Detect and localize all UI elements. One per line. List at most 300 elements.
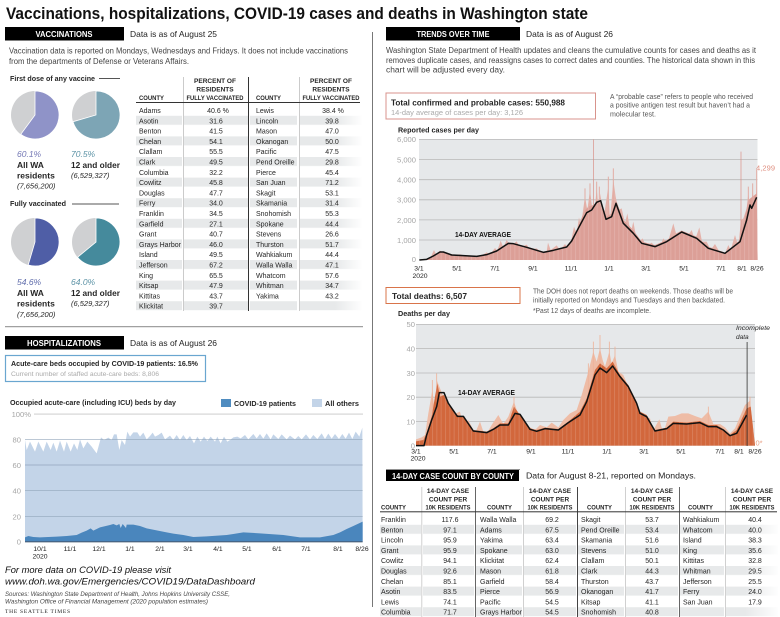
table: percent fully vaccinated by county: 32.2 <box>209 170 223 177</box>
table: case count by county: 53.7 <box>645 517 659 524</box>
table: percent fully vaccinated by county: Pacific <box>256 149 277 156</box>
panel: 14-day case count by county <box>380 470 780 617</box>
label: fully vaccinated all residents <box>17 277 56 319</box>
annotation: incomplete data <box>736 325 770 446</box>
table: percent fully vaccinated by county: Klickitat <box>139 304 163 311</box>
area chart: hospital beds: 11/1 <box>64 546 77 553</box>
chart: reported cases per day: 2020 <box>412 273 428 280</box>
table: percent fully vaccinated by county: Skamania <box>256 201 287 208</box>
table: case count by county: 40.0 <box>748 527 762 534</box>
table: case count by county: Lincoln <box>381 538 403 545</box>
table: case count by county: 14-DAY CASE <box>731 488 774 495</box>
chart: deaths per day: 8/26 <box>748 448 762 456</box>
label: latest cases: 4,299 <box>756 164 775 172</box>
label: first dose 12 and older: 70.5% <box>71 149 96 159</box>
area chart: hospital beds: 5/1 <box>242 546 252 553</box>
area chart: hospital beds: 10/1 <box>33 546 47 553</box>
table: case count by county: 32.8 <box>748 558 762 565</box>
table: percent fully vaccinated by county: Douglas <box>139 190 165 197</box>
intro text: vaccinations <box>9 46 348 66</box>
table: case count by county: 41.7 <box>645 589 659 596</box>
title: Vaccinations, hospitalizations, COVID-19 cases and deaths in Washington state <box>6 4 588 23</box>
chart title: cases: Reported cases per day <box>398 126 480 134</box>
annotation: incomplete data: data <box>736 334 749 341</box>
table: percent fully vaccinated by county: Spokane <box>256 221 284 228</box>
table: case count by county: 69.2 <box>545 517 559 524</box>
area chart: hospital beds: 3/1 <box>183 546 193 553</box>
table: case count by county: 14-DAY CASE <box>529 488 572 495</box>
table: percent fully vaccinated by county: Chelan <box>139 139 161 146</box>
table: percent fully vaccinated by county: 47.5 <box>325 149 339 156</box>
table: case count by county: 74.1 <box>443 599 457 606</box>
note: probable case <box>610 94 753 118</box>
table: percent fully vaccinated by county: Kitsap <box>139 283 159 290</box>
table: percent fully vaccinated by county: 47.9 <box>209 283 223 290</box>
table: percent fully vaccinated by county: 39.8 <box>325 118 339 125</box>
legend: COVID-19 patients <box>234 399 296 408</box>
area chart: hospital beds: 0 <box>17 538 21 547</box>
label: first dose 12 and older: 12 and older <box>71 160 121 170</box>
table: percent fully vaccinated by county: PERCENT OF <box>310 78 352 85</box>
area chart: hospital beds: 4/1 <box>213 546 223 553</box>
table: percent fully vaccinated by county: Pierce <box>256 170 276 177</box>
table: percent fully vaccinated by county: 55.5 <box>209 149 223 156</box>
table: case count by county: 41.1 <box>645 599 659 606</box>
table: case count by county: 54.5 <box>545 599 559 606</box>
table: percent fully vaccinated by county: 34.5 <box>209 211 223 218</box>
link: more data: www.doh.wa.gov/Emergencies/COVID19/DataDashboard <box>5 576 256 588</box>
annotation: incomplete data: Incomplete <box>736 325 770 332</box>
link: more data: For more data on COVID-19 please visit <box>5 565 171 576</box>
table: case count by county: Grant <box>381 548 399 555</box>
chart: reported cases per day: 8/26 <box>750 266 764 272</box>
callout: beds occupied: Acute-care beds occupied by COVID-19 patients: 16.5% <box>11 359 198 368</box>
table: percent fully vaccinated by county: Benton <box>139 129 161 136</box>
area chart: hospital beds: 40 <box>13 487 21 496</box>
table: case count by county: Pierce <box>480 589 500 596</box>
table: case count by county: Columbia <box>381 610 411 617</box>
table: percent fully vaccinated by county <box>136 77 363 312</box>
area chart: hospital beds <box>12 410 369 560</box>
chart: reported cases per day: 3/1 <box>414 266 424 272</box>
table: percent fully vaccinated by county: Lincoln <box>256 118 278 125</box>
area chart: hospital beds: 100% <box>12 410 31 419</box>
sources: Sources: Washington State Department of Health, Johns Hopkins University CSSE, <box>5 592 230 598</box>
date note: vaccinations: Data is as of August 25 <box>130 29 217 39</box>
table: percent fully vaccinated by county: 34.7 <box>325 283 339 290</box>
date note: hospitalizations: Data is as of August 26 <box>130 338 217 348</box>
table: percent fully vaccinated by county: 43.2 <box>325 293 339 300</box>
table: percent fully vaccinated by county: 31.6 <box>209 118 223 125</box>
table: case count by county: COUNTY <box>381 504 407 512</box>
note: deaths reporting <box>533 288 733 315</box>
fully vaccinated heading <box>10 199 119 208</box>
table: case count by county: Pacific <box>480 599 501 606</box>
area chart: hospital beds: 60 <box>13 461 21 470</box>
table: case count by county: 10K RESIDENTS <box>730 504 775 512</box>
table: case count by county: Jefferson <box>683 579 712 586</box>
callout: total cases <box>386 93 596 119</box>
chart: reported cases per day: 2,000 <box>397 216 416 225</box>
table: percent fully vaccinated by county: Wahkiakum <box>256 252 292 259</box>
table: percent fully vaccinated by county: 57.6 <box>325 273 339 280</box>
area chart: hospital beds: 2020 <box>32 554 48 560</box>
table: case count by county: Clallam <box>581 558 605 565</box>
label: fully vaccinated all residents: residents <box>17 298 55 308</box>
date note: case count: Data for August 8-21, reported on Mondays. <box>526 470 696 480</box>
panel: vaccinations <box>5 27 363 319</box>
heading: vaccinations: VACCINATIONS <box>36 30 93 39</box>
table: percent fully vaccinated by county: 67.2 <box>209 262 223 270</box>
intro text: vaccinations: from the departments of Defense or Veterans Affairs. <box>9 57 189 66</box>
label: 14-day average, cases: 14-DAY AVERAGE <box>455 232 511 239</box>
label: first dose 12 and older <box>71 149 121 180</box>
table: case count by county: Clark <box>581 568 598 576</box>
table: case count by county: COUNTY <box>688 504 714 512</box>
area chart: hospital beds: 80 <box>13 436 21 445</box>
table: percent fully vaccinated by county: Whatcom <box>256 273 286 280</box>
table: case count by county: Spokane <box>480 548 508 555</box>
table: case count by county: 95.9 <box>443 538 457 545</box>
table: percent fully vaccinated by county: Clallam <box>139 149 163 156</box>
table: case count by county: Walla Walla <box>480 517 517 524</box>
table: percent fully vaccinated by county: 49.5 <box>209 160 223 166</box>
table: case count by county: 38.3 <box>748 538 762 545</box>
chart: deaths per day: 40 <box>407 344 415 354</box>
chart: reported cases per day: 3,000 <box>397 196 416 204</box>
chart: reported cases per day: 7/1 <box>716 266 726 272</box>
table: case count by county: Stevens <box>581 548 607 555</box>
area chart: hospital beds: 20 <box>13 512 21 521</box>
note: deaths reporting: *Past 12 days of deaths are incomplete. <box>533 308 651 315</box>
table: percent fully vaccinated by county: Ferry <box>139 201 156 208</box>
label: fully vaccinated 12 and older: 12 and older <box>71 288 121 298</box>
pie: fully vaccinated 12 and older <box>72 218 120 266</box>
chart: deaths per day: 5/1 <box>676 448 686 456</box>
table: case count by county: 40.8 <box>645 610 659 617</box>
table: percent fully vaccinated by county: Thurston <box>256 242 284 249</box>
table: percent fully vaccinated by county: 27.1 <box>209 221 223 228</box>
panel: hospitalizations <box>5 336 369 560</box>
chart: reported cases per day: 6,000 <box>397 135 416 144</box>
label: fully vaccinated 12 and older <box>71 277 121 308</box>
chart: deaths per day: 1/1 <box>602 448 612 456</box>
table: percent fully vaccinated by county: Walla Walla <box>256 262 293 270</box>
label: fully vaccinated all residents: 54.6% <box>17 277 42 287</box>
chart: deaths per day: 5/1 <box>449 448 459 456</box>
area chart: hospital beds: 7/1 <box>301 546 311 553</box>
table: percent fully vaccinated by county: 50.0 <box>325 139 339 146</box>
chart: deaths per day: 7/1 <box>715 448 725 456</box>
table: case count by county: Skagit <box>581 517 601 524</box>
table: percent fully vaccinated by county: RESIDENTS <box>312 86 350 94</box>
table: case count by county: Whitman <box>683 568 711 576</box>
table: case count by county: Whatcom <box>683 527 713 534</box>
link: more data <box>5 565 256 588</box>
table: case count by county: San Juan <box>683 599 713 606</box>
table: case count by county: 71.7 <box>443 610 457 617</box>
chart: reported cases per day: 5/1 <box>679 266 689 272</box>
table: percent fully vaccinated by county: 45.4 <box>325 170 339 177</box>
label: first dose all residents: residents <box>17 170 55 180</box>
table: case count by county: Douglas <box>381 568 407 576</box>
table: case count by county: 63.4 <box>545 538 559 545</box>
chart: reported cases per day <box>397 135 775 280</box>
table: percent fully vaccinated by county: Stevens <box>256 232 282 239</box>
note: probable case: A “probable case” refers to people who received <box>610 94 753 101</box>
chart title: beds by day: Occupied acute-care (including ICU) beds by day <box>10 398 177 407</box>
table: percent fully vaccinated by county: RESIDENTS <box>196 86 234 94</box>
table: percent fully vaccinated by county: 54.1 <box>209 139 223 146</box>
table: case count by county: 56.9 <box>545 589 559 596</box>
table: percent fully vaccinated by county: 45.8 <box>209 180 223 187</box>
table: percent fully vaccinated by county: 65.5 <box>209 273 223 280</box>
table: percent fully vaccinated by county: Snohomish <box>256 211 291 218</box>
heading: trends <box>386 27 520 40</box>
label: first dose all residents: 60.1% <box>17 149 42 159</box>
label: latest deaths: 0* <box>756 438 763 448</box>
table: percent fully vaccinated by county: COUNTY <box>139 95 165 102</box>
intro text: trends <box>386 46 757 74</box>
table: percent fully vaccinated by county: 40.7 <box>209 232 223 239</box>
table: case count by county: 50.1 <box>645 558 659 565</box>
table: case count by county: 94.1 <box>443 558 457 565</box>
table: case count by county: 40.4 <box>748 517 762 524</box>
table: case count by county: 63.0 <box>545 548 559 555</box>
table: case count by county: Benton <box>381 527 403 534</box>
table: percent fully vaccinated by county: 47.0 <box>325 129 339 136</box>
table: case count by county: Franklin <box>381 517 406 524</box>
table: case count by county: Mason <box>480 568 501 576</box>
heading: hospitalizations <box>5 336 124 350</box>
pie: first dose all residents <box>11 91 59 139</box>
chart: deaths per day: 30 <box>407 369 415 378</box>
table: percent fully vaccinated by county: 46.0 <box>209 242 223 249</box>
intro text: trends: chart will be adjusted every day. <box>386 66 505 74</box>
table: case count by county: Skamania <box>581 538 612 545</box>
table: percent fully vaccinated by county: Mason <box>256 129 277 136</box>
table: percent fully vaccinated by county: 55.3 <box>325 211 339 218</box>
first dose heading: First dose of any vaccine <box>10 74 95 83</box>
table: percent fully vaccinated by county: FULLY VACCINATED <box>186 95 244 102</box>
panel: trends over time <box>386 27 775 462</box>
table: case count by county: Adams <box>480 527 502 534</box>
table: percent fully vaccinated by county: San Juan <box>256 180 286 187</box>
table: percent fully vaccinated by county: Okanogan <box>256 139 288 146</box>
table: percent fully vaccinated by county: Franklin <box>139 211 164 218</box>
table: percent fully vaccinated by county: Whitman <box>256 283 284 290</box>
legend <box>221 399 359 408</box>
area chart: hospital beds: 12/1 <box>92 546 106 553</box>
label: fully vaccinated all residents: (7,656,200) <box>17 310 56 319</box>
table: percent fully vaccinated by county: Island <box>139 252 158 259</box>
callout: beds occupied <box>6 356 206 382</box>
table: case count by county: COUNTY <box>487 504 513 512</box>
chart: reported cases per day: 0 <box>412 255 416 264</box>
label: fully vaccinated all residents: All WA <box>17 288 44 298</box>
table: case count by county: Ferry <box>683 589 700 596</box>
chart: deaths per day: 3/1 <box>639 448 649 456</box>
table: case count by county: 43.7 <box>645 579 659 586</box>
table: percent fully vaccinated by county: Asotin <box>139 118 159 125</box>
chart: deaths per day: 10 <box>407 418 415 426</box>
table: case count by county: 44.3 <box>645 568 659 576</box>
table: case count by county: COUNT PER <box>733 496 771 504</box>
table: case count by county: 92.6 <box>443 568 457 576</box>
table: percent fully vaccinated by county: 38.4 % <box>322 108 344 115</box>
table: case count by county: 67.5 <box>545 527 559 534</box>
label: first dose 12 and older: (6,529,327) <box>71 171 110 180</box>
chart: deaths per day: 50 <box>407 320 415 329</box>
date note: trends: Data is as of August 26 <box>526 29 613 39</box>
table: case count by county <box>380 487 780 617</box>
label: first dose all residents: (7,656,200) <box>17 182 56 190</box>
table: case count by county: 10K RESIDENTS <box>426 504 471 512</box>
table: case count by county: Yakima <box>480 538 503 545</box>
table: case count by county: Grays Harbor <box>480 610 523 617</box>
table: percent fully vaccinated by county: 71.2 <box>325 180 339 187</box>
table: percent fully vaccinated by county: Grant <box>139 232 157 239</box>
area chart: hospital beds: 8/1 <box>333 546 343 553</box>
table: case count by county: 54.5 <box>545 610 559 617</box>
table: percent fully vaccinated by county: 53.1 <box>325 190 339 197</box>
callout: beds occupied: Current number of staffed acute-care beds: 8,806 <box>11 371 159 378</box>
chart: reported cases per day: 1/1 <box>604 266 614 272</box>
chart: deaths per day: 2020 <box>410 456 426 462</box>
table: case count by county: 51.6 <box>645 538 659 545</box>
note: deaths reporting: The DOH does not report deaths on weekends. Those deaths will be <box>533 288 733 296</box>
table: case count by county: Lewis <box>381 599 399 606</box>
table: case count by county: Wahkiakum <box>683 517 719 524</box>
table: case count by county: Pend Oreille <box>581 527 620 534</box>
table: percent fully vaccinated by county: 41.5 <box>209 129 223 136</box>
table: percent fully vaccinated by county: 26.6 <box>325 232 339 239</box>
table: case count by county: 61.8 <box>545 568 559 576</box>
chart: reported cases per day: 1,000 <box>397 236 416 245</box>
table: case count by county: 95.9 <box>443 548 457 555</box>
note: probable case: molecular test. <box>610 112 656 118</box>
table: case count by county: 14-DAY CASE <box>427 488 470 495</box>
table: percent fully vaccinated by county: Skagit <box>256 190 276 197</box>
chart: reported cases per day: 4,000 <box>397 176 416 184</box>
chart: reported cases per day: 5,000 <box>397 156 416 164</box>
table: percent fully vaccinated by county: Grays Harbor <box>139 242 182 249</box>
table: percent fully vaccinated by county: FULLY VACCINATED <box>302 95 360 102</box>
table: percent fully vaccinated by county: 44.4 <box>325 252 339 259</box>
legend: All others <box>325 399 359 408</box>
table: percent fully vaccinated by county: Kittitas <box>139 293 161 300</box>
area chart: hospital beds: 6/1 <box>272 546 282 553</box>
label: fully vaccinated 12 and older: (6,529,327) <box>71 299 110 308</box>
pie: fully vaccinated all residents <box>11 218 59 266</box>
table: case count by county: COUNT PER <box>531 496 569 504</box>
area chart: hospital beds: 8/26 <box>355 546 369 553</box>
table: case count by county: 10K RESIDENTS <box>630 504 675 512</box>
heading: case count: 14-DAY CASE COUNT BY COUNTY <box>392 472 515 481</box>
table: percent fully vaccinated by county: 40.6 % <box>207 108 229 115</box>
table: case count by county: Cowlitz <box>381 558 404 565</box>
table: case count by county: 25.5 <box>748 579 762 586</box>
intro text: vaccinations: Vaccination data is reported on Mondays, Wednesdays and Fridays. It does not include vaccinations <box>9 46 348 56</box>
table: case count by county: 83.5 <box>443 589 457 596</box>
table: percent fully vaccinated by county: 34.0 <box>209 201 223 208</box>
table: case count by county: 97.1 <box>443 527 457 534</box>
table: case count by county: Okanogan <box>581 589 613 596</box>
chart: reported cases per day: 5/1 <box>452 266 462 272</box>
table: case count by county: COUNT PER <box>633 496 671 504</box>
chart title: deaths: Deaths per day <box>398 309 451 318</box>
label: 14-day average, deaths: 14-DAY AVERAGE <box>458 390 515 397</box>
chart: deaths per day: 20 <box>407 393 415 402</box>
chart: deaths per day: 11/1 <box>562 448 575 456</box>
table: percent fully vaccinated by county: Columbia <box>139 170 169 177</box>
fully vaccinated heading: Fully vaccinated <box>10 199 66 208</box>
table: case count by county: 53.4 <box>645 527 659 534</box>
table: case count by county: Asotin <box>381 589 401 596</box>
label: first dose all residents <box>17 149 56 190</box>
callout: total deaths <box>386 288 520 304</box>
table: percent fully vaccinated by county: 39.7 <box>209 304 223 311</box>
area chart: hospital beds: 2/1 <box>155 546 165 553</box>
table: case count by county: Island <box>683 538 702 545</box>
table: percent fully vaccinated by county: Clark <box>139 160 156 166</box>
table: percent fully vaccinated by county: 47.7 <box>209 190 223 197</box>
table: case count by county: 117.6 <box>442 517 459 524</box>
chart: reported cases per day: 8/1 <box>737 266 747 272</box>
label: first dose all residents: All WA <box>17 160 44 170</box>
intro text: trends: removes duplicate cases, and reassigns cases to correct dates and counties. The historical data shown in this <box>386 56 755 65</box>
table: percent fully vaccinated by county: 44.4 <box>325 221 339 228</box>
table: percent fully vaccinated by county: Adams <box>139 108 161 115</box>
table: percent fully vaccinated by county: King <box>139 273 153 280</box>
table: percent fully vaccinated by county: 51.7 <box>325 242 339 249</box>
chart: deaths per day <box>407 320 770 462</box>
credit: THE SEATTLE TIMES <box>5 609 70 615</box>
table: percent fully vaccinated by county: COUNTY <box>256 95 282 102</box>
table: case count by county: Thurston <box>581 579 609 586</box>
callout: total cases: 14-day average of cases per day: 3,126 <box>391 110 523 117</box>
table: case count by county: Garfield <box>480 579 505 586</box>
table: percent fully vaccinated by county: Lewis <box>256 108 274 115</box>
pie: first dose 12 and older <box>72 91 120 139</box>
table: case count by county: 85.1 <box>443 579 457 586</box>
heading: hospitalizations: HOSPITALIZATIONS <box>27 339 102 348</box>
table: percent fully vaccinated by county: 47.1 <box>325 262 339 270</box>
heading: trends: TRENDS OVER TIME <box>416 30 490 39</box>
table: case count by county: 14-DAY CASE <box>631 488 674 495</box>
table: case count by county: 58.4 <box>545 579 559 586</box>
table: percent fully vaccinated by county: Pend Oreille <box>256 160 295 166</box>
chart: deaths per day: 3/1 <box>411 448 421 456</box>
chart: deaths per day: 8/1 <box>734 448 744 456</box>
note: probable case: a positive antigen test result but haven’t had a <box>610 102 750 110</box>
label: fully vaccinated 12 and older: 64.0% <box>71 277 96 287</box>
table: case count by county: King <box>683 548 697 555</box>
table: percent fully vaccinated by county: 29.8 <box>325 160 339 166</box>
chart: reported cases per day: 9/1 <box>528 266 538 272</box>
table: case count by county: 24.0 <box>748 589 762 596</box>
table: case count by county: Klickitat <box>480 558 504 565</box>
area chart: hospital beds: 1/1 <box>125 546 135 553</box>
table: case count by county: Chelan <box>381 579 403 586</box>
callout: total deaths: Total deaths: 6,507 <box>392 291 467 301</box>
note: deaths reporting: initially reported on Mondays and Tuesdays and then backdated. <box>533 298 725 304</box>
table: case count by county: Kitsap <box>581 599 601 606</box>
intro text: trends: Washington State Department of Health updates and cleans the cumulative counts for cases and deaths as it <box>386 46 757 55</box>
table: percent fully vaccinated by county: Jefferson <box>139 262 168 270</box>
callout: total cases: Total confirmed and probable cases: 550,988 <box>391 98 565 108</box>
table: case count by county: 51.0 <box>645 548 659 555</box>
